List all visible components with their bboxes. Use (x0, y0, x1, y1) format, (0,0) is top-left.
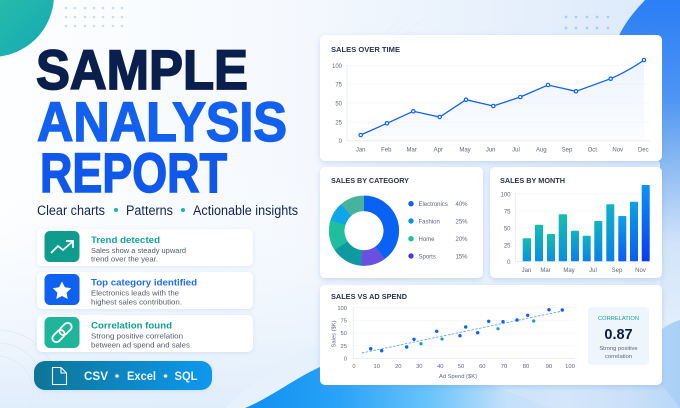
legend: 40% (455, 202, 468, 208)
formats text: Excel (127, 371, 156, 383)
bar chart: 0 (507, 260, 511, 266)
legend (408, 201, 468, 260)
formats text: SQL (174, 371, 198, 383)
card: top category identified (37, 272, 253, 309)
correlation callout: CORRELATION (598, 316, 639, 322)
scatter plot: 0 (344, 356, 347, 362)
line chart: Nov (612, 148, 623, 154)
scatter plot: 50 (341, 331, 347, 337)
legend: 20% (455, 237, 468, 243)
panel: sales over time (320, 35, 662, 161)
card: top category identified: Electronics leads with the (91, 290, 179, 298)
formats text (84, 371, 198, 383)
subtitle (37, 203, 298, 218)
card: correlation found: between ad spend and sales. (91, 342, 192, 350)
icon: document (52, 368, 66, 384)
correlation callout (588, 307, 649, 365)
legend: Home (418, 237, 435, 243)
line chart: 75 (335, 82, 343, 88)
card: trend detected: trend over the year. (91, 256, 158, 264)
legend: Fashion (418, 219, 440, 225)
scatter plot: 50 (458, 364, 464, 370)
subtitle: Clear charts (37, 203, 105, 218)
scatter plot: 20 (395, 364, 402, 370)
icon: trend arrow (44, 231, 80, 262)
title (36, 38, 287, 204)
scatter plot: 30 (416, 364, 423, 370)
card: correlation found: Strong positive correlation (91, 334, 183, 340)
bar chart: 75 (504, 210, 511, 216)
scatter plot: 90 (546, 364, 552, 370)
heading: SALES BY MONTH (500, 176, 565, 185)
scatter plot: 40 (437, 364, 444, 370)
panel: sales by month (490, 167, 662, 278)
scatter plot: 80 (523, 364, 529, 370)
heading: SALES OVER TIME (331, 45, 400, 54)
panel: sales vs ad spend (320, 285, 662, 385)
icon: star (44, 274, 80, 305)
scatter plot: 75 (341, 318, 347, 324)
blue corner shape (615, 0, 680, 330)
dot grid top left (65, 7, 123, 27)
subtitle: Patterns (126, 203, 173, 218)
bottom wave (245, 320, 680, 408)
scatter plot: 10 (373, 364, 380, 370)
line chart: Oct (588, 148, 597, 154)
card: trend detected: Sales show a steady upward (91, 248, 186, 255)
line chart: 25 (335, 120, 343, 126)
correlation callout: correlation (605, 354, 632, 360)
icon: chain link (44, 317, 80, 348)
line chart: 50 (335, 102, 343, 108)
legend: Electronics (418, 202, 448, 208)
card: correlation found: Correlation found (91, 320, 172, 330)
panel: sales by category (320, 167, 483, 278)
title: SAMPLE (36, 38, 248, 101)
card: trend detected: Trend detected (91, 235, 160, 245)
line chart: Feb (381, 148, 392, 154)
line chart: Dec (638, 148, 649, 154)
bar chart: 50 (504, 226, 511, 232)
title: REPORT (40, 141, 227, 204)
correlation callout: 0.87 (604, 327, 633, 343)
legend: 15% (455, 254, 468, 260)
scatter plot: Ad Spend ($K) (439, 374, 477, 380)
dot grid top right (565, 16, 609, 29)
scatter plot: 25 (341, 344, 347, 350)
card: trend detected (37, 229, 253, 266)
heading: SALES BY CATEGORY (331, 176, 409, 185)
legend: Sports (418, 254, 436, 260)
line chart: May (459, 148, 471, 154)
line chart: 0 (339, 139, 343, 145)
line chart: Aug (536, 148, 547, 154)
line chart: Apr (434, 148, 443, 154)
bar chart: Jul (589, 268, 597, 274)
heading: SALES VS AD SPEND (331, 292, 407, 301)
line chart: Jul (512, 148, 520, 154)
bar chart: 100 (500, 192, 511, 198)
teal corner circle (0, 0, 54, 57)
line chart: Sep (562, 148, 573, 154)
donut chart (337, 203, 391, 258)
scatter plot: 70 (501, 364, 507, 370)
scatter plot: 0 (352, 364, 356, 370)
line chart: Jan (356, 148, 366, 154)
scatter plot: 100 (337, 306, 347, 312)
card: top category identified: Top category identified (91, 278, 197, 288)
bar chart: May (563, 268, 575, 274)
card: top category identified: highest sales contribution. (91, 300, 182, 306)
bar chart: Nov (635, 268, 646, 274)
correlation callout: Strong positive (599, 346, 638, 352)
scatter plot (332, 306, 575, 380)
bar chart: Jan (522, 268, 531, 274)
scatter plot: Sales ($K) (332, 320, 338, 348)
title: ANALYSIS (37, 90, 287, 153)
bar chart: Mar (540, 268, 551, 274)
line chart: 100 (332, 64, 343, 70)
subtitle: Actionable insights (193, 203, 298, 218)
line chart: Jun (486, 148, 496, 154)
bar chart: 25 (504, 244, 511, 250)
bar chart: Sep (612, 268, 623, 274)
file formats pill (34, 361, 212, 390)
card: correlation found (37, 315, 253, 352)
legend: 25% (455, 219, 468, 225)
line chart: Mar (407, 148, 417, 154)
bottom wave highlight (490, 385, 680, 408)
bar chart (500, 185, 650, 274)
scatter plot: 60 (479, 364, 486, 370)
formats text: CSV (84, 371, 108, 383)
line chart (332, 58, 650, 153)
scatter plot: 100 (565, 364, 575, 370)
